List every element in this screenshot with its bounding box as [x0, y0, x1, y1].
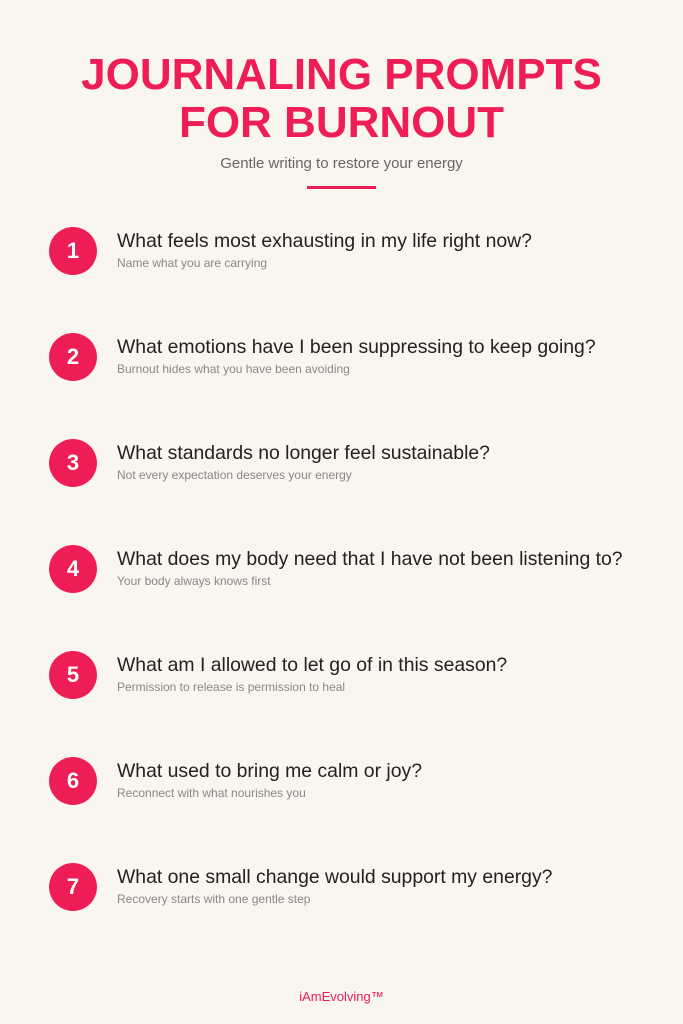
- title: [81, 50, 602, 147]
- prompt 6: [49, 757, 422, 805]
- prompt 7: 7: [67, 874, 79, 899]
- prompt 6: 6: [67, 768, 79, 793]
- prompt 7: Recovery starts with one gentle step: [117, 892, 310, 906]
- prompt 1: [49, 227, 532, 275]
- prompt 4: Your body always knows first: [117, 574, 271, 588]
- prompt 3: [49, 439, 490, 487]
- title: JOURNALING PROMPTS: [81, 50, 602, 99]
- prompt 7: What one small change would support my energy?: [117, 866, 552, 888]
- title: FOR BURNOUT: [179, 98, 504, 147]
- prompt 1: What feels most exhausting in my life right now?: [117, 230, 532, 252]
- prompt 2: Burnout hides what you have been avoiding: [117, 362, 350, 376]
- prompt 3: 3: [67, 450, 79, 475]
- prompt 5: 5: [67, 662, 79, 687]
- subtitle: Gentle writing to restore your energy: [220, 155, 463, 172]
- footer: iAmEvolving™: [299, 989, 384, 1004]
- prompt 4: What does my body need that I have not been listening to?: [117, 548, 623, 570]
- prompt 3: Not every expectation deserves your energy: [117, 468, 352, 482]
- prompt 4: 4: [67, 556, 79, 581]
- prompt 3: What standards no longer feel sustainable?: [117, 442, 490, 464]
- prompt 4: [49, 545, 623, 593]
- prompt 2: [49, 333, 596, 381]
- prompt 7: [49, 863, 552, 911]
- prompt 5: Permission to release is permission to heal: [117, 680, 345, 694]
- prompt 2: 2: [67, 344, 79, 369]
- prompt 1: Name what you are carrying: [117, 256, 267, 270]
- prompt 6: What used to bring me calm or joy?: [117, 760, 422, 782]
- prompt 5: What am I allowed to let go of in this season?: [117, 654, 507, 676]
- prompt 6: Reconnect with what nourishes you: [117, 786, 306, 800]
- prompt 5: [49, 651, 507, 699]
- prompt 1: 1: [67, 238, 79, 263]
- prompt 2: What emotions have I been suppressing to keep going?: [117, 336, 596, 358]
